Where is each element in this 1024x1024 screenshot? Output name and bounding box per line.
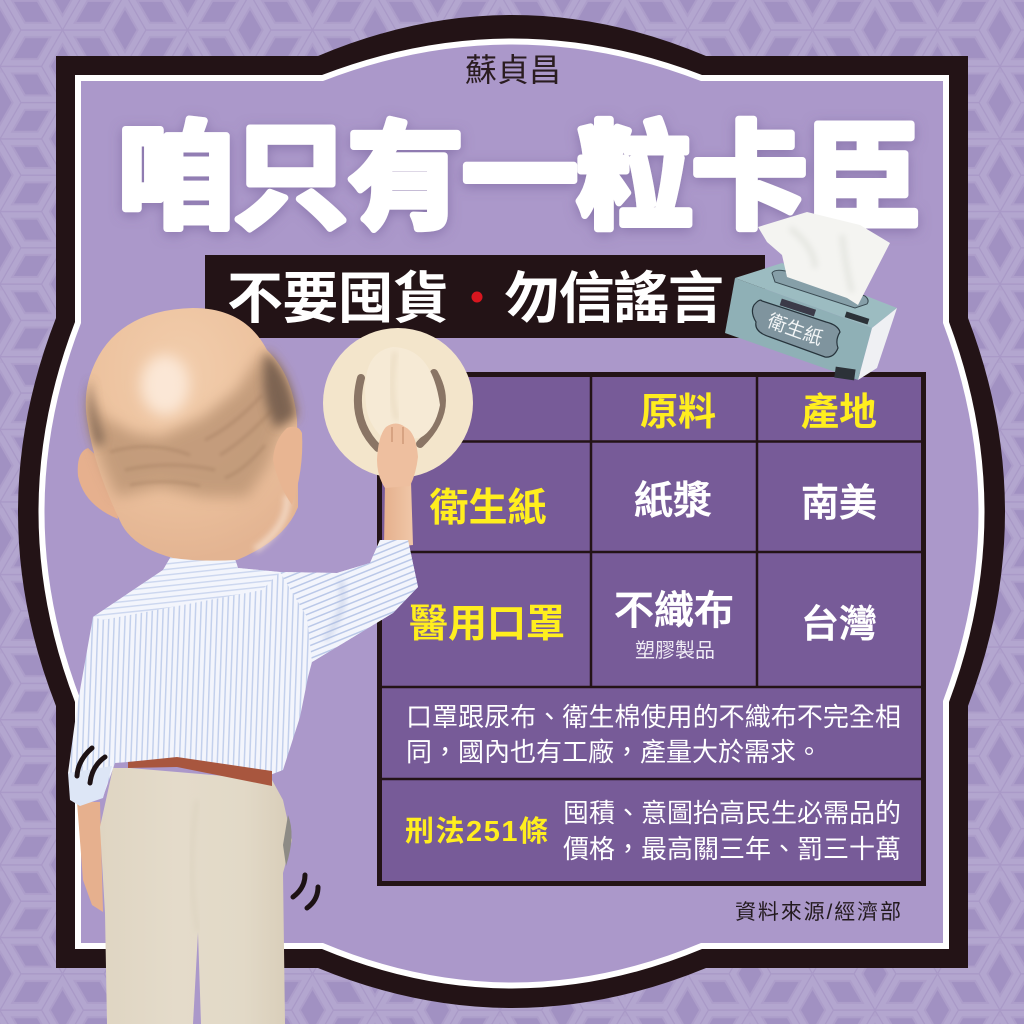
subtitle banner: 不要囤貨 (227, 267, 449, 330)
row: toilet paper: 紙漿 (634, 480, 712, 523)
row: medical mask: 醫用口罩 (409, 603, 565, 646)
icon: straw hat (323, 328, 473, 478)
icon: tissue box (725, 212, 897, 380)
raised arm and hand (377, 424, 418, 548)
tissue (758, 212, 890, 305)
box label: 衛生紙 (764, 310, 826, 350)
author name: 蘇貞昌 (465, 52, 561, 88)
note on non-woven fabric: 口罩跟尿布、衛生棉使用的不織布不完全相 (406, 702, 901, 732)
hair band (88, 350, 296, 497)
dark hair at sides (88, 352, 296, 448)
neck highlight (255, 495, 287, 550)
right ear (273, 427, 302, 505)
rolled cuff (68, 766, 112, 806)
row: medical mask: 不織布 (614, 589, 734, 633)
criminal law note: 刑法251條 (405, 815, 548, 848)
sleeve fold shading (325, 580, 343, 640)
row: toilet paper (429, 480, 877, 530)
source note: 資料來源/經濟部 (735, 901, 901, 924)
shirt yoke (93, 553, 280, 620)
trousers (100, 768, 292, 1024)
scalp highlight (141, 355, 189, 415)
column header: origin: 產地 (801, 392, 877, 434)
criminal law note: 囤積、意圖抬高民生必需品的 (563, 798, 901, 828)
belt (128, 757, 272, 786)
person seen from behind (68, 308, 418, 1024)
motion marks: right (293, 875, 318, 908)
hair strands (110, 395, 272, 486)
row: toilet paper: 南美 (801, 483, 877, 525)
comparison table (379, 374, 924, 884)
head (78, 308, 302, 561)
criminal law note: 價格，最高關三年、罰三十萬 (563, 834, 901, 864)
subtitle banner: 勿信謠言 (504, 267, 724, 330)
row: toilet paper: 衛生紙 (429, 487, 547, 530)
row: medical mask (409, 589, 877, 662)
column header: raw material: 原料 (640, 392, 716, 434)
row: medical mask: 台灣 (801, 604, 877, 646)
subtitle banner (205, 255, 765, 338)
box label plate (752, 300, 840, 357)
note on non-woven fabric: 同，國內也有工廠，產量大於需求。 (406, 737, 822, 767)
shirt (68, 540, 418, 806)
note on non-woven fabric (406, 702, 901, 767)
shirt sleeve raised (280, 540, 418, 662)
left hand (77, 802, 103, 912)
motion marks: left (77, 748, 105, 783)
criminal law note (405, 798, 901, 864)
left ear (78, 448, 118, 519)
title: 咱只有一粒卡臣 (118, 113, 922, 243)
row: medical mask: 塑膠製品 (635, 639, 715, 662)
